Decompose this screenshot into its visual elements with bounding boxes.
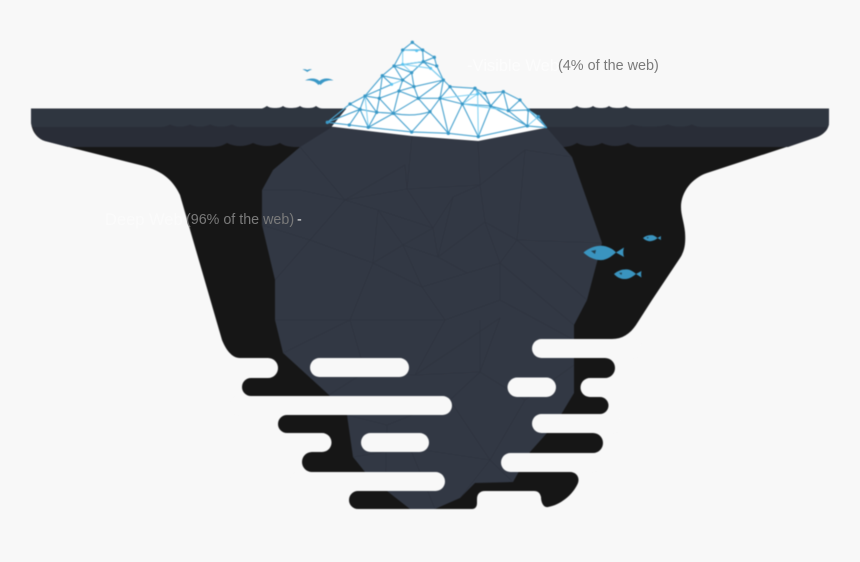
mesh edges light [365, 50, 538, 137]
iceberg tip [326, 41, 547, 141]
label: visible web [467, 57, 659, 75]
white channels cutting the silhouette [230, 339, 642, 491]
label: deep web [105, 211, 302, 229]
large fish [584, 246, 624, 260]
sea surface upper band [31, 106, 829, 127]
small fish lower [614, 269, 642, 279]
label: deep web: - [297, 212, 302, 228]
mesh nodes light [390, 49, 479, 95]
underwater mesh lines [262, 136, 602, 509]
small bird [302, 69, 312, 72]
deep water silhouette [31, 109, 829, 509]
sea surface lower band [32, 124, 829, 147]
tip white fill [332, 42, 547, 141]
small fish upper [643, 235, 661, 241]
mesh nodes [326, 41, 540, 138]
large bird [305, 78, 334, 85]
underwater iceberg [262, 127, 602, 509]
label: visible web: (4% of the web) [558, 58, 659, 74]
mesh edges dark [327, 42, 547, 137]
label: deep web: (96% of the web) [186, 212, 294, 228]
label: deep web: Deep Web [105, 211, 183, 229]
label: visible web: -Visible Web [467, 57, 559, 75]
